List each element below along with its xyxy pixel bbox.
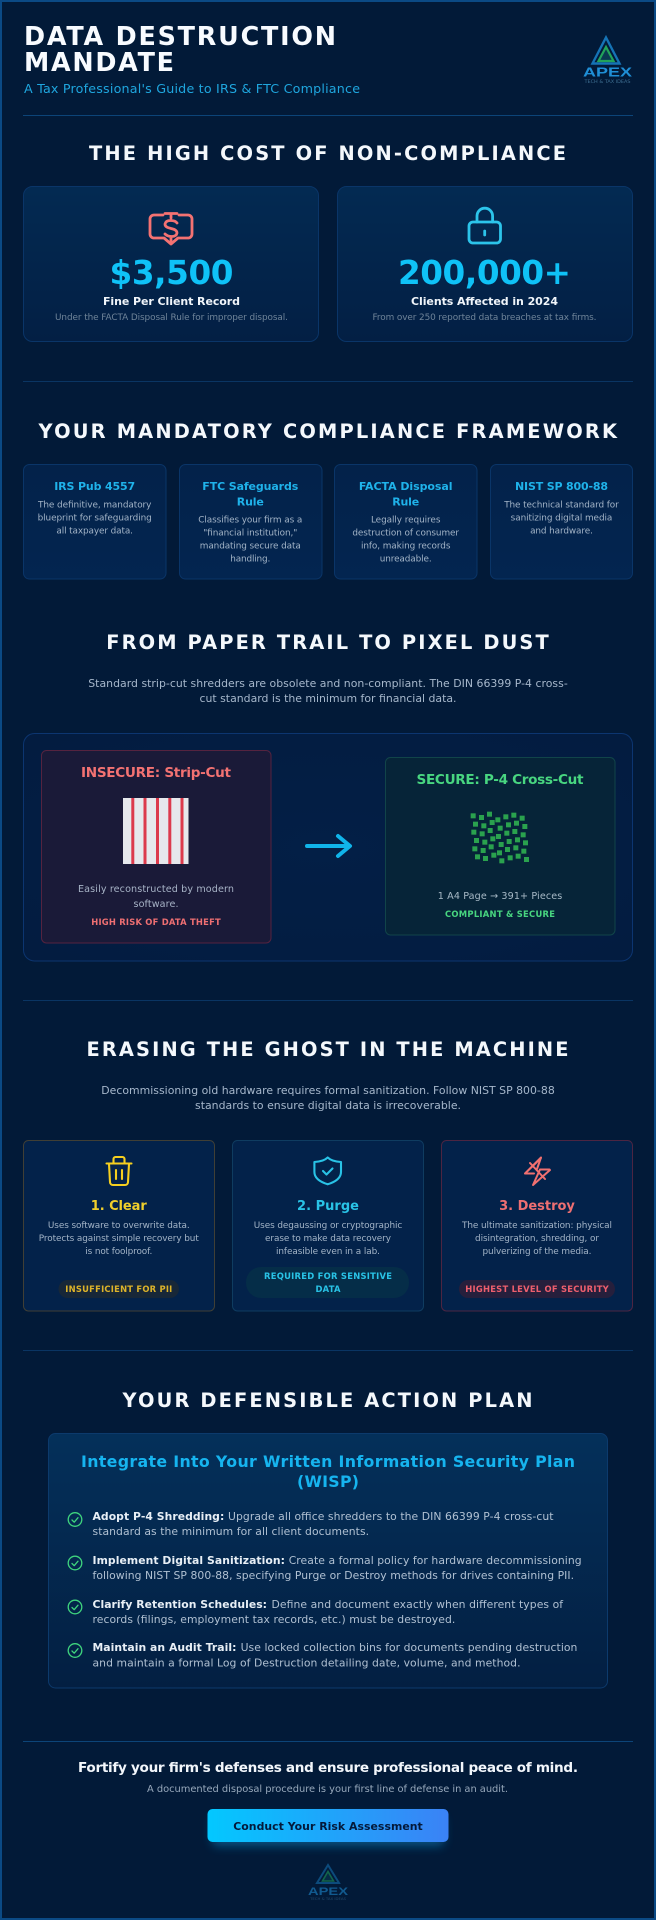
intro text — [101, 1084, 555, 1112]
badge: insufficient: INSUFFICIENT FOR PII — [65, 1284, 172, 1294]
section: erasing — [24, 1038, 632, 1311]
item: audit trail: Maintain an Audit Trail: — [92, 1641, 236, 1654]
card: secure cross-cut: 1 A4 Page → 391+ Pieces — [438, 891, 562, 902]
intro text: cut standard is the minimum for financial data. — [200, 692, 456, 705]
panel title: Integrate Into Your Written Information Security Plan — [81, 1452, 575, 1471]
card: NIST SP 800-88: and hardware. — [530, 526, 593, 536]
item: digital sanitization: Create a formal policy for hardware decommissioning — [289, 1554, 582, 1567]
card: FTC Safeguards Rule: FTC Safeguards — [202, 480, 299, 493]
item: retention schedules: Clarify Retention Schedules: — [92, 1598, 267, 1611]
card: clear: Protects against simple recovery but — [39, 1234, 199, 1244]
item: digital sanitization — [68, 1554, 582, 1582]
item: audit trail — [68, 1641, 577, 1670]
panel title: (WISP) — [297, 1472, 359, 1491]
icon: lock — [469, 208, 500, 243]
card: purge: 2. Purge — [297, 1199, 359, 1214]
card: purge: erase to make data recovery — [265, 1234, 391, 1244]
logo: Apex footer — [308, 1865, 349, 1901]
card: purge: Uses degaussing or cryptographic — [254, 1221, 402, 1231]
label: Fine Per Client Record — [103, 295, 240, 308]
section: framework — [24, 420, 632, 579]
logo: Apex header: TECH & TAX IDEAS — [583, 79, 631, 84]
card: insecure strip-cut — [42, 750, 271, 943]
item: audit trail: and maintain a formal Log of Destruction detailing date, volume, and method. — [92, 1656, 520, 1670]
heading: paper trail: FROM PAPER TRAIL TO PIXEL DUST — [106, 631, 550, 654]
panel: comparison — [24, 734, 632, 961]
logo: Apex footer: TECH & TAX IDEAS — [309, 1897, 346, 1901]
card: FACTA Disposal Rule: unreadable. — [380, 555, 432, 565]
header — [24, 21, 633, 96]
intro text: Standard strip-cut shredders are obsolete and non-compliant. The DIN 66399 P-4 cross- — [88, 677, 568, 690]
footer heading: Fortify your firm's defenses and ensure professional peace of mind. — [78, 1760, 578, 1776]
item: retention schedules: Define and document exactly when different types of — [272, 1598, 563, 1611]
item: adopt shredding: standard as the minimum for all client documents. — [92, 1525, 369, 1538]
heading: erasing: ERASING THE GHOST IN THE MACHINE — [86, 1038, 568, 1061]
card: insecure strip-cut: INSECURE: Strip-Cut — [81, 765, 232, 781]
card: IRS Pub 4557: all taxpayer data. — [56, 526, 133, 536]
card: purge — [232, 1140, 424, 1311]
card: NIST SP 800-88: sanitizing digital media — [511, 513, 612, 523]
card: clear: 1. Clear — [91, 1199, 147, 1214]
icon: lightning — [525, 1158, 550, 1185]
logo: Apex header: APEX — [583, 66, 633, 80]
item: digital sanitization: Implement Digital Sanitization: — [92, 1554, 285, 1567]
item: digital sanitization: following NIST SP 800-88, specifying Purge or Destroy methods for drives containing PII. — [92, 1569, 574, 1582]
panel title — [81, 1452, 575, 1491]
card: destroy: disintegration, shredding, or — [475, 1234, 599, 1244]
card: IRS Pub 4557: The definitive, mandatory — [37, 500, 151, 510]
item: audit trail: Use locked collection bins for documents pending destruction — [241, 1641, 577, 1654]
card: IRS Pub 4557: IRS Pub 4557 — [54, 480, 135, 493]
card: FTC Safeguards Rule — [180, 464, 322, 579]
label: Clients Affected in 2024 — [411, 295, 558, 308]
title — [24, 21, 336, 77]
logo: Apex header — [583, 38, 633, 84]
heading: action plan: YOUR DEFENSIBLE ACTION PLAN — [122, 1389, 532, 1412]
card: secure cross-cut: SECURE: P-4 Cross-Cut — [416, 772, 584, 788]
icon: money message — [150, 214, 192, 244]
panel: clients affected — [338, 186, 632, 342]
card: insecure strip-cut: software. — [134, 899, 178, 910]
card: FACTA Disposal Rule: info, making records — [361, 542, 451, 552]
item: adopt shredding: Adopt P-4 Shredding: — [92, 1510, 224, 1523]
item: retention schedules: records (filings, employment tax records, etc.) must be destroyed. — [92, 1613, 455, 1626]
item: adopt shredding: Upgrade all office shredders to the DIN 66399 P-4 cross-cut — [228, 1510, 554, 1523]
title: MANDATE — [24, 47, 174, 77]
section: high cost — [24, 142, 632, 342]
badge: required: DATA — [316, 1284, 341, 1294]
heading: framework: YOUR MANDATORY COMPLIANCE FRAMEWORK — [38, 420, 618, 443]
card: NIST SP 800-88 — [490, 464, 632, 579]
section: paper trail — [24, 631, 632, 961]
intro text — [88, 677, 568, 705]
card: FACTA Disposal Rule — [334, 464, 477, 579]
card: FTC Safeguards Rule: handling. — [230, 555, 270, 565]
subtitle: A Tax Professional's Guide to IRS & FTC Compliance — [24, 81, 360, 96]
icon: trash — [106, 1157, 132, 1185]
card: FTC Safeguards Rule: Classifies your firm as a — [198, 516, 302, 526]
icon: shield check — [314, 1158, 341, 1184]
illustration: strip-cut paper — [123, 798, 188, 864]
section: action plan — [48, 1389, 608, 1688]
item: adopt shredding — [68, 1510, 553, 1538]
card: IRS Pub 4557: blueprint for safeguarding — [38, 513, 152, 523]
logo: Apex footer: APEX — [308, 1886, 349, 1898]
card: FTC Safeguards Rule: mandating secure data — [200, 542, 301, 552]
badge: insufficient — [58, 1280, 179, 1298]
card: NIST SP 800-88: The technical standard for — [503, 500, 619, 510]
card: FACTA Disposal Rule: Rule — [392, 495, 419, 508]
badge: highest: HIGHEST LEVEL OF SECURITY — [465, 1284, 610, 1294]
intro text: Decommissioning old hardware requires formal sanitization. Follow NIST SP 800-88 — [101, 1084, 555, 1097]
card: FACTA Disposal Rule: FACTA Disposal — [359, 480, 453, 493]
heading: high cost: THE HIGH COST OF NON-COMPLIANCE — [89, 142, 566, 165]
intro text: standards to ensure digital data is irrecoverable. — [195, 1099, 461, 1112]
footer subtext: A documented disposal procedure is your first line of defense in an audit. — [147, 1784, 508, 1795]
stat: $3,500: $3,500 — [110, 254, 234, 292]
card: FACTA Disposal Rule: destruction of consumer — [352, 529, 459, 539]
button: Conduct Your Risk Assessment — [233, 1820, 423, 1833]
panel: WISP — [48, 1434, 608, 1688]
item: retention schedules — [68, 1598, 563, 1626]
badge: required — [246, 1267, 409, 1298]
card: FTC Safeguards Rule: "financial institution," — [203, 529, 297, 539]
card: clear: Uses software to overwrite data. — [48, 1221, 190, 1231]
note: From over 250 reported data breaches at tax firms. — [372, 313, 596, 323]
card: purge: infeasible even in a lab. — [276, 1247, 380, 1257]
card: IRS Pub 4557 — [24, 464, 166, 579]
card: FACTA Disposal Rule: Legally requires — [371, 516, 441, 526]
button — [208, 1809, 448, 1846]
card: insecure strip-cut: Easily reconstructed by modern — [78, 884, 234, 895]
card: NIST SP 800-88: NIST SP 800-88 — [515, 480, 608, 493]
panel: fine per record — [24, 186, 318, 342]
card: destroy: The ultimate sanitization: physical — [461, 1221, 612, 1231]
badge: required: REQUIRED FOR SENSITIVE — [264, 1271, 392, 1281]
card: insecure strip-cut: HIGH RISK OF DATA THEFT — [91, 917, 221, 927]
footer — [78, 1760, 578, 1901]
card: clear — [24, 1140, 214, 1311]
badge: highest — [459, 1280, 615, 1298]
title: DATA DESTRUCTION — [24, 21, 336, 51]
note: Under the FACTA Disposal Rule for improper disposal. — [55, 313, 288, 323]
card: destroy: pulverizing of the media. — [482, 1247, 592, 1257]
card: FTC Safeguards Rule: Rule — [237, 495, 264, 508]
card: destroy: 3. Destroy — [499, 1199, 575, 1214]
illustration: cross-cut particles — [471, 812, 529, 863]
card: destroy — [442, 1140, 632, 1311]
card: secure cross-cut: COMPLIANT & SECURE — [445, 909, 555, 919]
card: clear: is not foolproof. — [85, 1247, 152, 1257]
card: secure cross-cut — [386, 758, 615, 935]
stat: 200,000+: 200,000+ — [398, 254, 571, 292]
arrow — [307, 836, 350, 856]
